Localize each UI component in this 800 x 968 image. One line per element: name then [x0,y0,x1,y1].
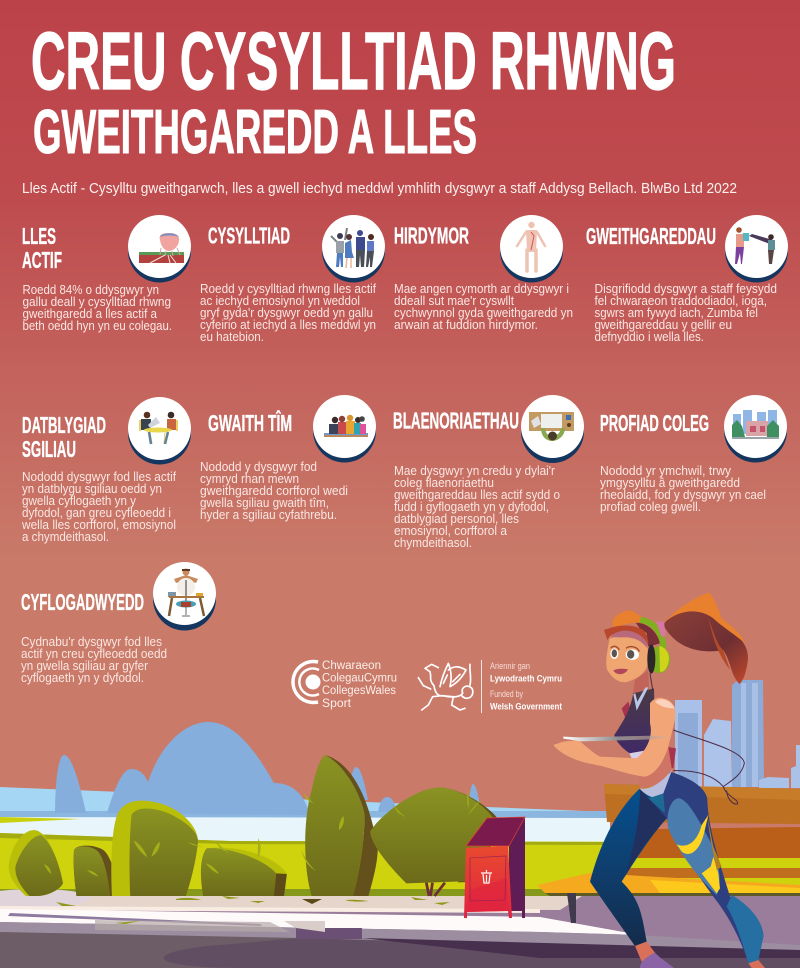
belly [631,747,672,788]
text: datblygiad personol, lles [394,512,519,526]
fallen leaves [56,896,450,924]
text: hyder a sgiliau cyfathrebu. [200,508,337,522]
panel: Cysylltiad [200,215,385,344]
text: Roedd y cysylltiad rhwng lles actif [200,282,376,296]
logo: Welsh Government: Funded by [490,689,523,700]
text: Nododd yr ymchwil, trwy [600,464,732,478]
bench [537,784,800,923]
text: actif yn creu cyfleoedd oedd [21,647,167,661]
text: cyflogaeth yn y dyfodol. [21,671,144,685]
eyes [610,648,618,659]
left leg [590,788,667,946]
text: cychwynnol gyda gweithgaredd yn [394,306,573,320]
text: gweithgaredd corfforol wedi [200,484,348,498]
text: sgwrs am fywyd iach, Zumba fel [594,306,758,320]
headphones [640,620,663,648]
text: Mae angen cymorth ar ddysgwyr i [394,282,569,296]
logo: Chwaraeon ColegauCymru: CollegesWales [322,685,396,697]
logo: Welsh Government [418,660,565,713]
text: dyfodol, gan greu cyfleoedd i [22,506,171,520]
text: yn datblygu sgiliau oedd yn [22,482,162,496]
icon: group sitting together [313,395,376,462]
title: GWEITHGAREDD A LLES [33,98,477,167]
icon: bin symbol [481,870,492,883]
icon: person at desk [521,395,584,463]
text: wella lles corfforol, emosiynol [21,518,176,532]
icon: concentric arcs [293,662,320,703]
icon: two people at a table [128,397,191,464]
icon: human body [500,215,563,282]
litter bin [464,817,525,918]
icon: dragon [418,663,473,710]
icon: kick exercise [725,215,788,282]
vest [614,688,655,753]
bush 5 [301,755,378,896]
text: gweithgareddau y gellir eu [594,318,732,332]
neck [633,670,649,707]
illustration: park scene [0,593,800,968]
text: yn gwella sgiliau ar gyfer [21,659,148,673]
text: Mae dysgwyr yn credu y dylai'r [394,464,555,478]
text: Roedd 84% o ddysgwyr yn [22,283,159,297]
bush 6 [370,787,498,896]
text: emosiynol, corfforol a [394,524,507,538]
text: beth oedd hyn yn eu colegau. [22,319,172,333]
heading: SGILIAU [22,436,76,462]
text: gwella sgiliau gwaith tîm, [200,496,329,510]
logo: Welsh Government: Lywodraeth Cymru [490,674,562,684]
logo: Chwaraeon ColegauCymru: Sport [322,698,352,710]
text: fel chwaraeon traddodiadol, ioga, [594,294,767,308]
heading: GWAITH TÎM [208,409,292,436]
rear hip [622,702,676,768]
road base [0,896,800,968]
heading: LLES [22,223,56,249]
icon: brain on running track [128,215,191,282]
logo: Chwaraeon ColegauCymru: Chwaraeon [322,660,381,672]
text: cymryd rhan mewn [200,472,299,486]
mountains [55,722,480,815]
text: Disgrifiodd dysgwyr a staff feysydd [594,282,777,296]
bush 1 [9,830,63,896]
bushes [9,755,498,896]
text: a chymdeithasol. [22,530,109,544]
dark hair behind [635,622,660,647]
panel: Profiad Coleg [600,395,787,514]
heading: DATBLYGIAD [22,412,106,438]
text: rheolaidd, fod y dysgwyr yn cael [600,488,766,502]
icon: man at desk [153,562,216,630]
panel: Gweithgareddau [586,215,788,344]
pavement [0,896,582,910]
foot [635,942,765,968]
icon: group of people [322,215,385,282]
bush 4 [201,838,287,896]
heading: HIRDYMOR [394,222,469,248]
panel: Blaenoriaethau [393,395,584,550]
heading: ACTIF [22,247,62,273]
text: gryf gyda'r dysgwyr oedd yn gallu [200,306,373,320]
phone [563,736,673,741]
text: cyfeirio at iechyd a lles meddwl yn [200,318,376,332]
panel: Cyflogadwyedd [21,562,216,685]
hair fringe [612,611,660,630]
panel: Lles Actif [22,215,191,333]
text: gweithgareddau lles actif sydd o [394,488,560,502]
right leg [652,772,763,963]
text: profiad coleg gwell. [600,500,701,514]
heading: CYFLOGADWYEDD [21,589,144,615]
city buildings [675,680,800,788]
logo: Welsh Government: Welsh Government [490,702,563,712]
white water [0,817,610,842]
grass [0,833,800,896]
grey kerb [0,922,800,950]
heading: BLAENORIAETHAU [393,408,519,434]
text: coleg flaenoriaethu [394,476,494,490]
face [606,626,648,682]
icon: college buildings [724,395,787,462]
heading: CYSYLLTIAD [208,222,290,248]
text: gallu deall y cysylltiad rhwng [22,295,171,309]
arm [553,698,675,777]
logo: Welsh Government: Ariennir gan [490,661,530,672]
white kerb [0,909,640,935]
text: Nododd y dysgwyr fod [200,460,317,474]
text: gweithgaredd a lles actif a [22,307,157,321]
ponytail [663,610,748,684]
text: ac iechyd emosiynol yn weddol [200,294,360,308]
text: fudd i gyflogaeth yn y dyfodol, [394,500,549,514]
logo: Chwaraeon ColegauCymru: ColegauCymru [322,672,397,684]
panel: Gwaith Tîm [200,395,376,522]
text: chymdeithasol. [394,536,472,550]
text: arwain at fuddion hirdymor. [394,318,538,332]
text: ddeall sut mae'r cyswllt [394,294,514,308]
light blue water band [0,787,610,820]
logo: Chwaraeon ColegauCymru [293,660,400,710]
heading: PROFIAD COLEG [600,410,709,436]
runner [553,593,765,968]
bush 2 [74,846,119,896]
text: Cydnabu'r dysgwyr fod lles [21,635,162,649]
text: defnyddio i wella lles. [594,330,704,344]
bush 3 [111,801,204,896]
text: gwella cyflogaeth yn y [22,494,137,508]
waistband [639,769,672,798]
subtitle: Lles Actif - Cysylltu gweithgarwch, lles a gwell iechyd meddwl ymhlith dysgwyr a staff Addysg Bellach. BlwBo Ltd 2022 [22,181,737,197]
text: eu hatebion. [200,330,264,344]
earphone cable [650,673,744,804]
title [31,16,676,167]
panel: Hirdymor [394,215,576,332]
text: ymgysylltu â gweithgaredd [600,476,740,490]
text: Nododd dysgwyr fod lles actif [22,470,176,484]
dark road [0,932,800,968]
panel: Datblygiad Sgiliau [21,397,191,544]
